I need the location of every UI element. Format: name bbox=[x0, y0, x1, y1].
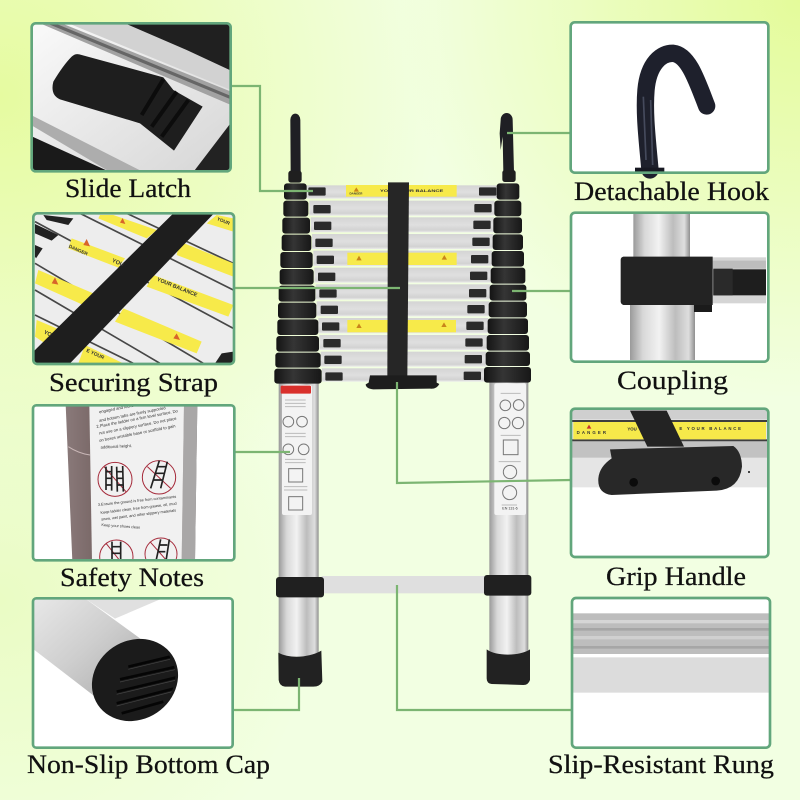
lower ladder section bbox=[276, 380, 531, 687]
right band bbox=[484, 575, 531, 596]
panel: coupling bbox=[571, 213, 768, 362]
label: slip-resistant rung: Slip-Resistant Rung bbox=[548, 749, 774, 779]
left pole collars bbox=[274, 183, 322, 384]
safety instruction text: Keep your shoes clean bbox=[101, 523, 140, 530]
ladder bbox=[274, 113, 531, 687]
hook: left bbox=[290, 114, 301, 172]
rungs bbox=[307, 185, 497, 382]
left bottom cap bbox=[278, 651, 322, 687]
safety instruction text: snow, wet paint, and other slippery materials bbox=[101, 508, 176, 522]
right safety sticker: EN 131-6 bbox=[502, 506, 518, 510]
label: detachable hook: Detachable Hook bbox=[574, 176, 770, 206]
safety instruction text: Keep ladder clean, free from grease, oil, mud bbox=[100, 502, 177, 515]
prohibition signs bbox=[98, 460, 178, 559]
left lower pole bbox=[279, 380, 319, 657]
label: safety notes: Safety Notes bbox=[60, 562, 204, 592]
panel: grip handle bbox=[571, 409, 768, 557]
panel: securing strap: E YOUR bbox=[85, 348, 105, 361]
left band bbox=[276, 577, 324, 597]
panel: detachable hook bbox=[571, 22, 768, 173]
safety instruction text: additional height. bbox=[100, 443, 132, 450]
right bottom cap bbox=[487, 649, 530, 685]
left safety sticker bbox=[281, 385, 312, 515]
panel: grip handle: E YOUR BALANCE bbox=[679, 426, 741, 431]
safety instruction text: 2.Place the ladder on a firm level surface. Do bbox=[96, 408, 179, 429]
safety instruction text bbox=[96, 406, 178, 529]
safety instruction text: on boxes unstable base or scaffold to gain bbox=[99, 423, 177, 443]
safety instruction text: not use on a slippery surface. Do not place bbox=[99, 416, 178, 436]
safety instruction text: 3.Ensure the ground is free from contaminants bbox=[98, 495, 176, 507]
panel: grip handle: DANGER bbox=[577, 430, 607, 435]
right pole collars bbox=[484, 183, 531, 383]
latches bbox=[308, 187, 496, 381]
label: slide latch: Slide Latch bbox=[65, 173, 191, 203]
panel: securing strap: YO bbox=[43, 330, 53, 339]
panel: slip-resistant rung bbox=[572, 597, 771, 748]
label: coupling: Coupling bbox=[617, 365, 728, 395]
panel: non-slip bottom cap bbox=[32, 598, 233, 748]
yellow warning labels bbox=[346, 185, 457, 332]
label: securing strap: Securing Strap bbox=[49, 367, 218, 397]
bottom rung bbox=[322, 576, 485, 593]
panel: safety notes bbox=[32, 404, 236, 562]
panel: securing strap: YOU bbox=[111, 258, 124, 268]
safety instruction text: and bottom tabs are firmly supported bbox=[99, 405, 167, 423]
connector lines bbox=[231, 86, 571, 710]
label: grip handle: Grip Handle bbox=[606, 561, 746, 591]
upper ladder section bbox=[274, 113, 531, 389]
panel: securing strap: YOUR BALANCE bbox=[156, 277, 198, 299]
right safety sticker bbox=[494, 383, 526, 515]
right lower pole bbox=[489, 380, 528, 657]
yellow warning labels: YOUR TOUR BALANCE bbox=[380, 188, 444, 193]
panel: securing strap bbox=[33, 213, 235, 365]
grip handle bbox=[366, 375, 439, 389]
hook: right bbox=[500, 113, 514, 172]
label: non-slip bottom cap: Non-Slip Bottom Cap bbox=[27, 749, 270, 779]
panel: securing strap: DANGER bbox=[68, 244, 89, 257]
securing strap bbox=[387, 182, 409, 377]
panel: grip handle: YOU bbox=[627, 427, 637, 432]
safety instruction text: engaged and locked in place.Check that the bbox=[99, 394, 180, 414]
panel: securing strap: YOUR bbox=[216, 216, 231, 226]
yellow warning labels: DANGER bbox=[350, 191, 363, 195]
panel: slide latch bbox=[31, 23, 231, 172]
hook bases bbox=[288, 170, 516, 183]
